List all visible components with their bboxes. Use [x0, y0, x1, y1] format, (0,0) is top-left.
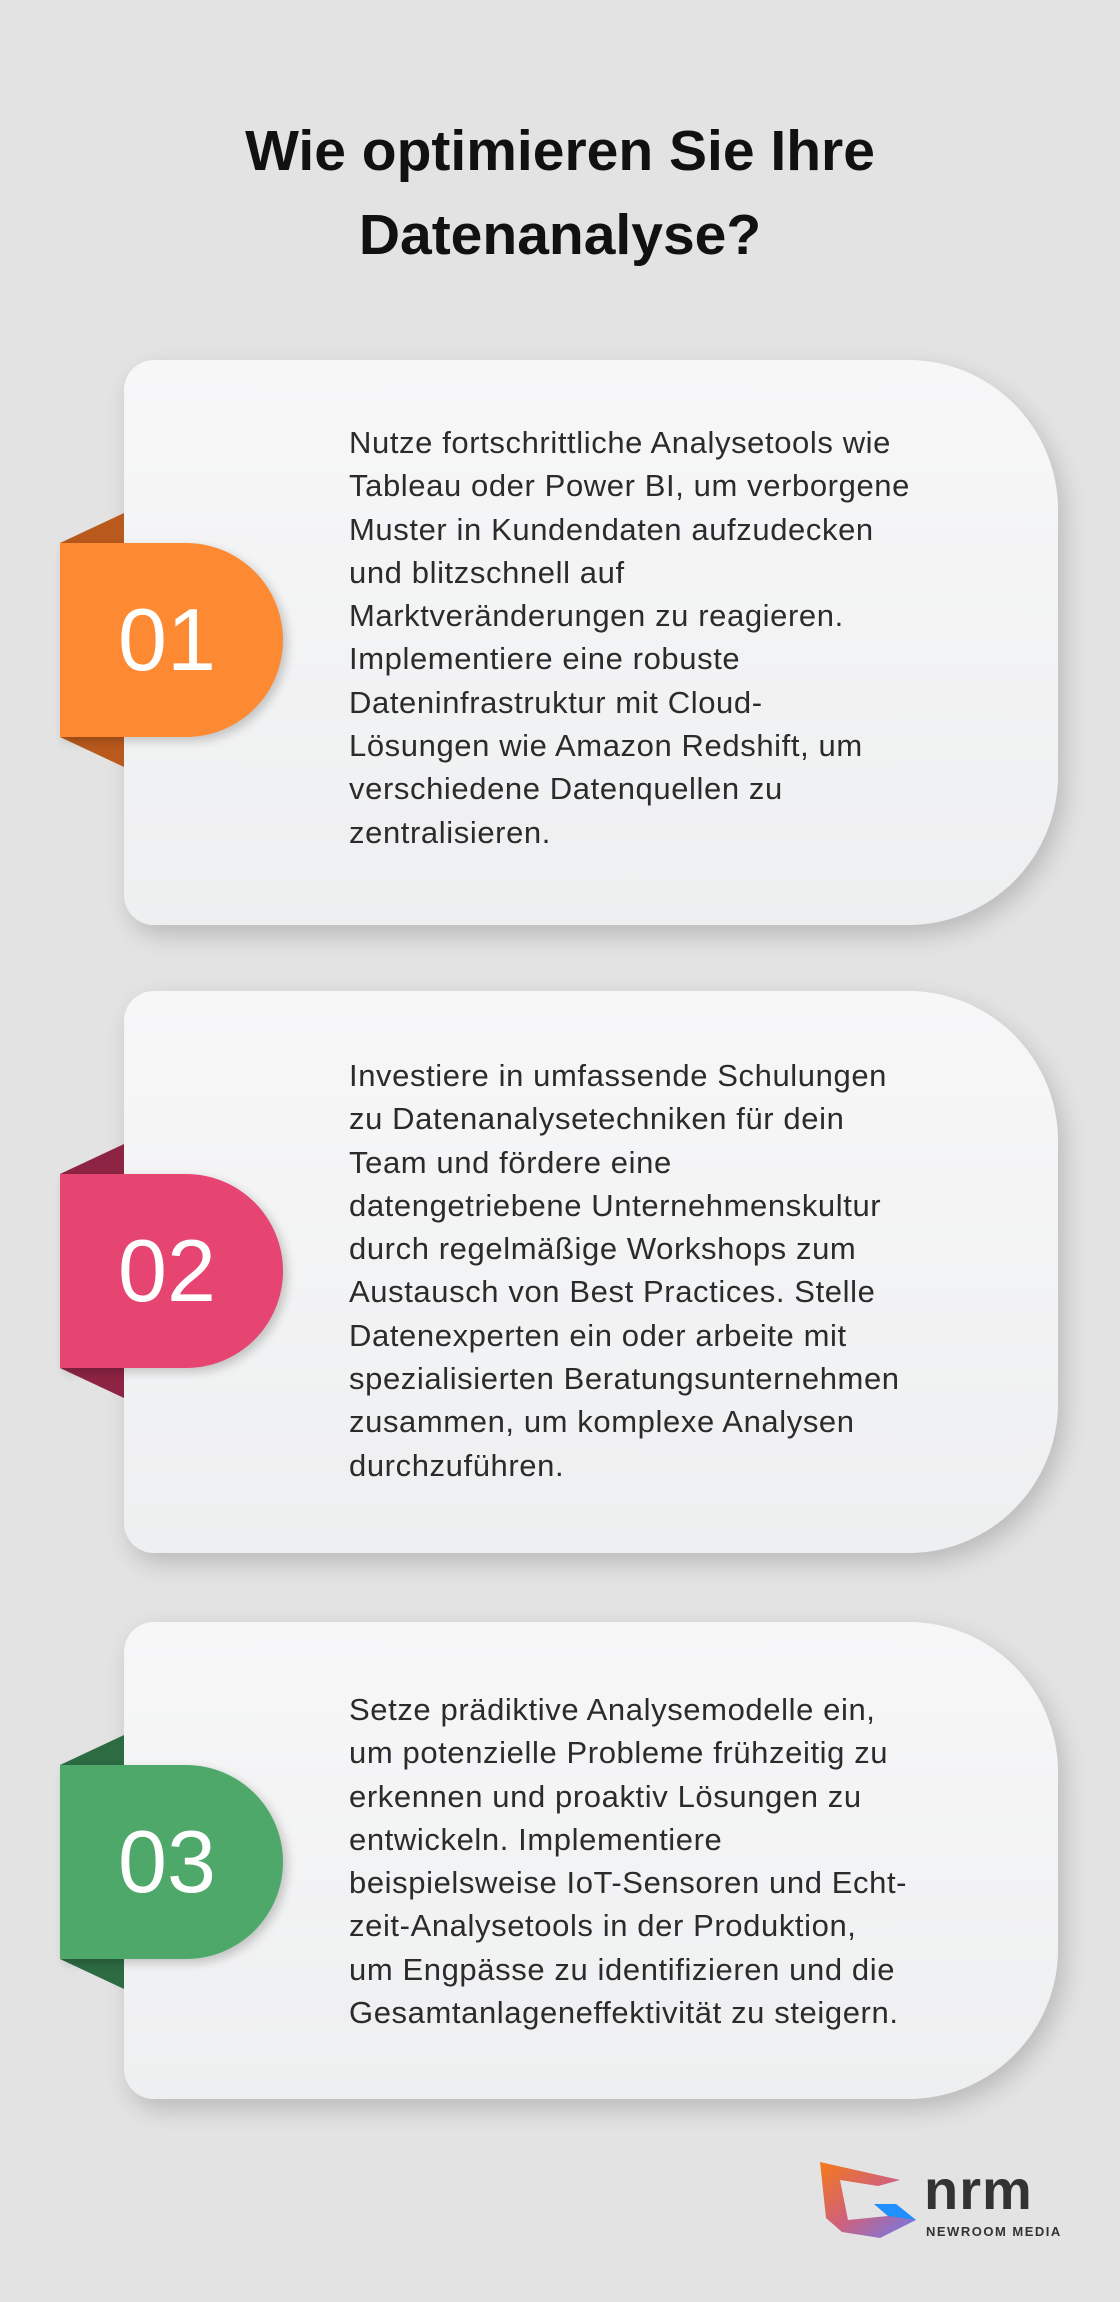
text 3: entwickeln. Implementiere — [349, 1822, 722, 1857]
text 2: zu Datenanalysetechniken für dein — [349, 1101, 844, 1136]
badge 01 — [60, 543, 283, 737]
text 2: durch regelmäßige Workshops zum — [349, 1231, 856, 1266]
fold 1 top — [60, 513, 124, 543]
title: Datenanalyse? — [359, 203, 761, 267]
panel: card 2 — [124, 991, 1058, 1553]
fold 3 top — [60, 1735, 124, 1765]
text 2: Investiere in umfassende Schulungen — [349, 1058, 887, 1093]
text 1: verschiedene Datenquellen zu — [349, 771, 783, 806]
title — [245, 119, 875, 267]
text 1: zentralisieren. — [349, 815, 551, 850]
text 2: datengetriebene Unternehmenskultur — [349, 1188, 881, 1223]
text 1 — [349, 425, 910, 850]
logo text: nrm — [924, 2158, 1033, 2221]
fold 2 bottom — [60, 1368, 124, 1398]
logo — [820, 2158, 1062, 2239]
icon: logo mark — [820, 2162, 916, 2238]
panel: card 3 — [124, 1622, 1058, 2099]
text 2: durchzuführen. — [349, 1448, 564, 1483]
text 2: zusammen, um komplexe Analysen — [349, 1404, 855, 1439]
badge 03 — [60, 1765, 283, 1959]
text 3: Gesamtanlageneffektivität zu steigern. — [349, 1995, 899, 2030]
badge 02 — [60, 1174, 283, 1368]
text 3: zeit-Analysetools in der Produktion, — [349, 1908, 857, 1943]
title: Wie optimieren Sie Ihre — [245, 119, 875, 183]
badge 01: 01 — [118, 590, 216, 689]
text 2 — [349, 1058, 900, 1483]
text 1: und blitzschnell auf — [349, 555, 625, 590]
text 3: erkennen und proaktiv Lösungen zu — [349, 1779, 862, 1814]
text 1: Muster in Kundendaten aufzudecken — [349, 512, 874, 547]
text 1: Nutze fortschrittliche Analysetools wie — [349, 425, 891, 460]
badge 03: 03 — [118, 1812, 216, 1911]
text 3: Setze prädiktive Analysemodelle ein, — [349, 1692, 876, 1727]
panel: card 1 — [124, 360, 1058, 925]
fold 1 bottom — [60, 737, 124, 767]
text 2: Austausch von Best Practices. Stelle — [349, 1274, 875, 1309]
text 3: beispielsweise IoT-Sensoren und Echt- — [349, 1865, 907, 1900]
text 1: Marktveränderungen zu reagieren. — [349, 598, 844, 633]
text 3: um potenzielle Probleme frühzeitig zu — [349, 1735, 888, 1770]
text 3 — [349, 1692, 907, 2030]
text 2: Datenexperten ein oder arbeite mit — [349, 1318, 847, 1353]
text 2: spezialisierten Beratungsunternehmen — [349, 1361, 900, 1396]
text 1: Dateninfrastruktur mit Cloud- — [349, 685, 763, 720]
text 1: Implementiere eine robuste — [349, 641, 740, 676]
text 2: Team und fördere eine — [349, 1145, 672, 1180]
badge 02: 02 — [118, 1221, 216, 1320]
text 3: um Engpässe zu identifizieren und die — [349, 1952, 895, 1987]
logo: NEWROOM MEDIA — [926, 2224, 1062, 2239]
text 1: Tableau oder Power BI, um verborgene — [349, 468, 910, 503]
fold 2 top — [60, 1144, 124, 1174]
fold 3 bottom — [60, 1959, 124, 1989]
text 1: Lösungen wie Amazon Redshift, um — [349, 728, 863, 763]
